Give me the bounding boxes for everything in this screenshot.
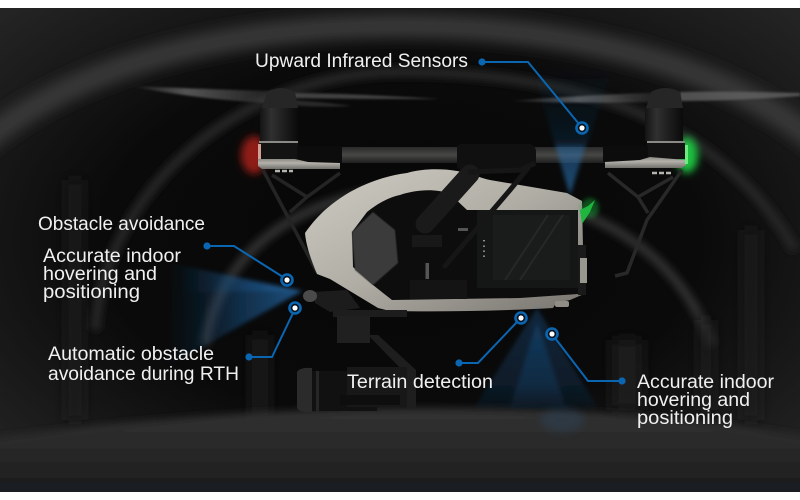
camera [297,367,407,412]
right motor [603,88,686,173]
carbon boom [340,147,605,163]
upward sensor cone [530,62,615,195]
green light strip [685,145,688,164]
label: upward infrared sensors: Upward Infrared Sensors [255,51,468,72]
red light strip [258,144,261,159]
bottom band [0,482,800,492]
center clamp [457,144,536,170]
downward sensor cones [474,308,598,408]
left landing gear [262,168,340,272]
label: accurate indoor hovering (right): Accurate indoor [637,372,775,393]
background tunnel arches [0,26,800,345]
rear latch [555,245,587,307]
leader: obstacle avoidance [204,243,292,286]
thin strut [445,168,528,266]
label: obstacle avoidance: Obstacle avoidance [38,214,205,235]
label: automatic obstacle avoidance [48,344,239,385]
label: accurate indoor hovering (left): hovering and [43,264,157,285]
gimbal [303,290,416,408]
rear green light [580,198,599,224]
right landing gear [608,170,682,276]
body shell [305,169,584,311]
leader: accurate indoor hovering (right) [546,328,625,384]
floor [0,408,800,500]
floor blue reflection [540,408,584,432]
label: terrain detection: Terrain detection [347,372,493,393]
battery [477,210,578,288]
cavity details [410,228,468,299]
right propeller [505,92,800,103]
label: accurate indoor hovering (left): positioning [43,282,140,303]
tubular strut [425,174,470,224]
label: automatic obstacle avoidance: avoidance during RTH [48,364,239,385]
label: accurate indoor hovering (left): Accurate indoor [43,246,182,267]
bottom white strip [0,492,800,500]
leader: upward infrared sensors [479,59,588,134]
body cavity [352,190,578,300]
label: automatic obstacle avoidance: Automatic obstacle [48,344,214,365]
left sensor cones [165,262,302,368]
label: accurate indoor hovering (right): hovering and [637,390,750,411]
label: accurate indoor hovering (left) [43,246,182,303]
front grille [352,212,398,285]
leader: terrain detection [456,312,526,366]
left propeller [130,86,440,107]
label: accurate indoor hovering (right): positioning [637,408,733,429]
leader: automatic obstacle avoidance [246,302,300,360]
left motor [258,88,342,171]
background pillars [68,180,758,420]
battery indicator dots [483,240,485,257]
label: accurate indoor hovering (right) [637,372,775,429]
red navigation light glow [241,136,267,174]
green navigation light glow [676,137,698,173]
drone [258,88,688,412]
top white strip [0,0,800,8]
